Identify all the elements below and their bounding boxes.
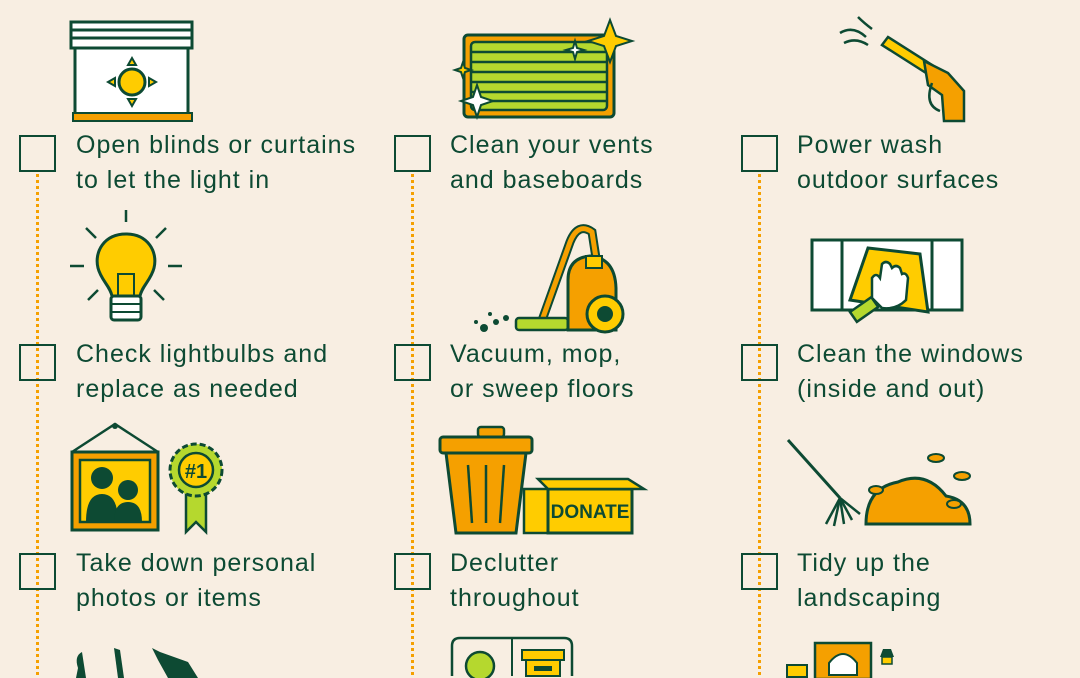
checkbox 9 xyxy=(741,553,778,590)
icon: family photo and ribbon: #1 xyxy=(185,461,207,483)
text 5 xyxy=(450,340,635,403)
text 3: outdoor surfaces xyxy=(797,166,999,194)
text 2: and baseboards xyxy=(450,166,643,194)
text 9: Tidy up the xyxy=(797,549,931,577)
text 8: throughout xyxy=(450,584,580,612)
checkbox 1 xyxy=(19,135,56,172)
checkbox 8 xyxy=(394,553,431,590)
text 5: Vacuum, mop, xyxy=(450,340,621,368)
icon: lightbulb xyxy=(70,210,182,322)
text 6: Clean the windows xyxy=(797,340,1024,368)
text 7 xyxy=(76,549,316,612)
text 8 xyxy=(450,549,580,612)
checkbox 7 xyxy=(19,553,56,590)
text 9 xyxy=(797,549,941,612)
text 4: replace as needed xyxy=(76,375,299,403)
text 3 xyxy=(797,131,999,194)
icon: rake and leaves xyxy=(787,439,972,526)
text 5: or sweep floors xyxy=(450,375,635,403)
text 1: to let the light in xyxy=(76,166,270,194)
text 6 xyxy=(797,340,1024,403)
checkbox 3 xyxy=(741,135,778,172)
icon: power washer xyxy=(839,16,966,122)
icon: tools (partial) xyxy=(76,648,198,678)
icon: vacuum xyxy=(474,224,624,334)
checkbox 4 xyxy=(19,344,56,381)
text 4: Check lightbulbs and xyxy=(76,340,328,368)
icon: window cleaning xyxy=(810,238,964,324)
icon: trash can and donate box xyxy=(438,426,648,534)
checkbox 2 xyxy=(394,135,431,172)
text 4 xyxy=(76,340,328,403)
text 3: Power wash xyxy=(797,131,943,159)
text 2: Clean your vents xyxy=(450,131,654,159)
checkbox 5 xyxy=(394,344,431,381)
icon: house front door (partial) xyxy=(786,642,894,678)
text 9: landscaping xyxy=(797,584,941,612)
text 7: photos or items xyxy=(76,584,262,612)
text 6: (inside and out) xyxy=(797,375,985,403)
text 2 xyxy=(450,131,654,194)
text 1 xyxy=(76,131,356,194)
checkbox 6 xyxy=(741,344,778,381)
icon: vent xyxy=(452,17,636,120)
text 1: Open blinds or curtains xyxy=(76,131,356,159)
icon: family photo and ribbon xyxy=(70,422,224,535)
icon: window blinds with sun xyxy=(70,20,194,122)
text 8: Declutter xyxy=(450,549,559,577)
icon: trash can and donate box: DONATE xyxy=(551,502,629,523)
icon: storage shelf (partial) xyxy=(450,636,574,678)
text 7: Take down personal xyxy=(76,549,316,577)
